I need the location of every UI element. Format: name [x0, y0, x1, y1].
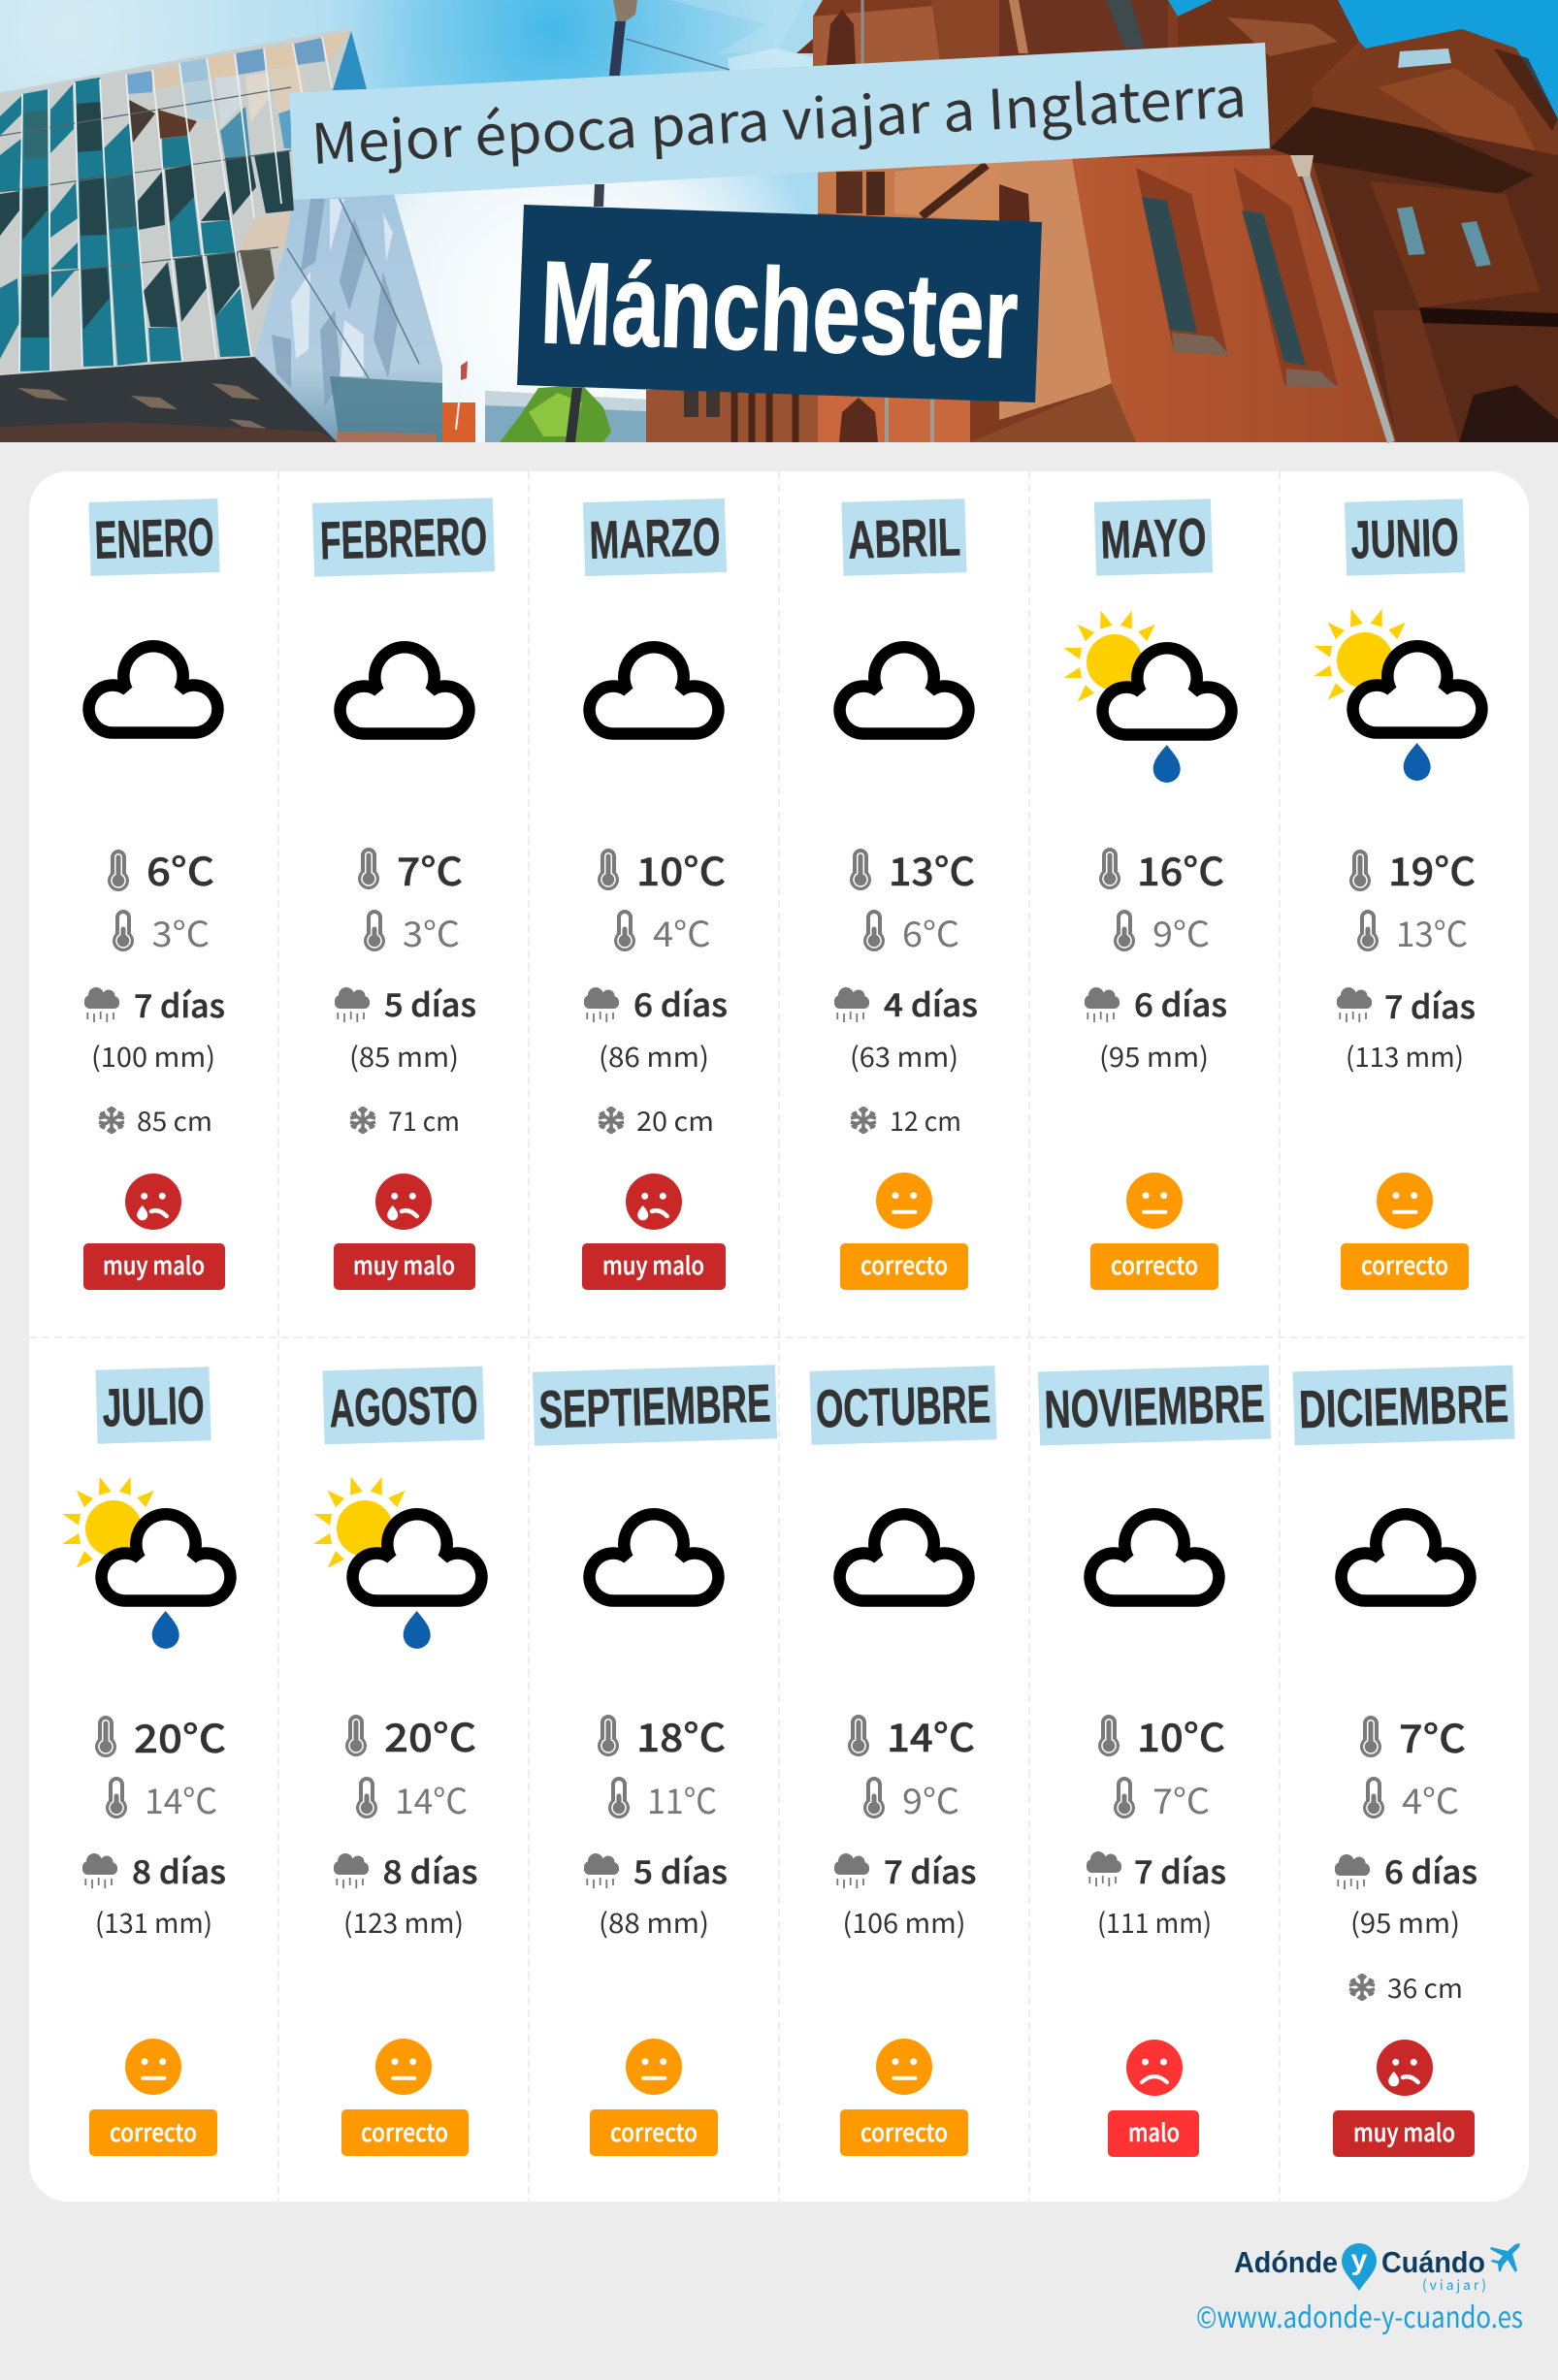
min temperature [863, 907, 959, 957]
rainy days [1335, 1847, 1477, 1893]
icon: cloud [590, 647, 718, 733]
rainy days [1337, 981, 1476, 1028]
panel: agosto [313, 1367, 485, 2156]
rainy days: 6 días [633, 980, 728, 1026]
snowfall [1349, 1968, 1463, 2006]
rainy days: 4 días [884, 980, 978, 1026]
rating badge: correcto [590, 2109, 718, 2156]
month label: septiembre [533, 1365, 777, 1446]
max temperature [598, 1707, 726, 1763]
rainfall: (113 mm) [1346, 1037, 1464, 1076]
panel: junio [1314, 499, 1481, 1290]
logo: Adónde y Cuándo viajar: Adónde [1234, 2245, 1338, 2279]
rainy days [334, 1847, 477, 1893]
max temperature [1098, 1707, 1225, 1763]
rating face [125, 2039, 181, 2095]
max temperature: 19°C [1388, 841, 1476, 897]
snowfall [851, 1101, 961, 1139]
month label: febrero: FEBRERO [319, 505, 488, 571]
min temperature: 9°C [1152, 907, 1210, 957]
panel: abril [834, 499, 978, 1290]
panel: julio [62, 1367, 230, 2156]
rating face [876, 1173, 932, 1229]
max temperature [1349, 841, 1476, 897]
rating face [1126, 1173, 1183, 1229]
rainy days: 7 días [1134, 1847, 1226, 1893]
max temperature [850, 841, 975, 897]
rating face [876, 2039, 932, 2095]
snowfall: 85 cm [137, 1101, 212, 1139]
rainy days [1085, 980, 1227, 1026]
max temperature [1099, 841, 1224, 897]
rainfall: (95 mm) [1350, 1903, 1460, 1942]
rainy days: 7 días [134, 981, 225, 1027]
icon: map pin [1342, 2243, 1377, 2291]
rainy days: 7 días [884, 1847, 976, 1893]
rating badge: correcto [840, 2109, 968, 2156]
min temperature [356, 1774, 468, 1824]
rainfall: (100 mm) [91, 1037, 215, 1076]
month label: marzo [583, 499, 727, 576]
rating face [1126, 2040, 1183, 2096]
rating face [125, 1174, 181, 1230]
rainy days [335, 980, 476, 1026]
rating face [1377, 1173, 1433, 1229]
snowfall [99, 1101, 212, 1139]
rainy days [84, 981, 225, 1027]
max temperature: 16°C [1137, 841, 1224, 897]
rainy days: 8 días [132, 1847, 226, 1893]
rating badge: muy malo [1333, 2110, 1475, 2157]
max temperature: 10°C [1137, 1707, 1225, 1763]
month label: enero: ENERO [94, 506, 214, 570]
rating badge: correcto: correcto [110, 2114, 197, 2149]
month label: julio [95, 1367, 211, 1444]
rating badge: muy malo [334, 1243, 475, 1290]
title banner: Mejor época para viajar a Inglaterra: Mejor época para viajar a Inglaterra [309, 53, 1249, 180]
max temperature [848, 1707, 975, 1763]
rating badge: correcto: correcto [860, 1247, 948, 1282]
rainy days: 5 días [633, 1847, 728, 1893]
month label: mayo: MAYO [1100, 506, 1207, 570]
icon: cloud [590, 1514, 718, 1600]
min temperature [1114, 907, 1210, 957]
rating badge: correcto: correcto [610, 2114, 698, 2149]
rainfall: (85 mm) [349, 1037, 459, 1076]
min temperature: 14°C [145, 1774, 217, 1824]
snowfall: 71 cm [388, 1101, 460, 1139]
min temperature [364, 907, 460, 957]
rating face [375, 1174, 432, 1230]
rainfall: (88 mm) [599, 1903, 709, 1942]
month label: octubre: OCTUBRE [815, 1373, 991, 1439]
rainy days: 6 días [1134, 980, 1227, 1026]
icon: sun, cloud and raindrop [62, 1477, 230, 1649]
min temperature: 13°C [1396, 907, 1468, 957]
icon: cloud [840, 1514, 968, 1600]
max temperature: 6°C [146, 841, 214, 897]
snowfall: 36 cm [1387, 1968, 1463, 2006]
month label: septiembre: SEPTIEMBRE [538, 1372, 771, 1440]
rating badge: correcto: correcto [860, 2114, 948, 2149]
month label: noviembre [1038, 1365, 1271, 1446]
max temperature: 13°C [889, 841, 975, 897]
rainfall: (106 mm) [842, 1903, 966, 1942]
max temperature: 7°C [397, 841, 463, 897]
header photo: Manchester buildings [0, 0, 1558, 442]
title banner: Mánchester: Mánchester [538, 236, 1020, 383]
rating badge: muy malo: muy malo [602, 1247, 704, 1282]
rating badge: muy malo [83, 1243, 225, 1290]
icon: cloud [840, 647, 968, 733]
panel: climate table card [29, 471, 1529, 2202]
min temperature: 9°C [902, 1774, 959, 1824]
rainfall: (131 mm) [95, 1903, 212, 1942]
month label: mayo [1094, 499, 1213, 576]
rating badge: correcto [89, 2109, 217, 2156]
rainy days [584, 980, 728, 1026]
min temperature: 3°C [403, 907, 460, 957]
max temperature: 14°C [887, 1707, 975, 1763]
rainy days [834, 980, 978, 1026]
rating face [375, 2039, 432, 2095]
min temperature [863, 1774, 959, 1824]
icon: cloud [341, 647, 469, 733]
rainfall: (123 mm) [343, 1903, 464, 1942]
icon: sun, cloud and raindrop [1063, 611, 1231, 783]
max temperature [345, 1707, 476, 1763]
panel: mayo [1063, 499, 1231, 1290]
min temperature [1357, 907, 1468, 957]
logo: Adónde y Cuándo viajar: (viajar) [1422, 2275, 1486, 2295]
rating badge: correcto [341, 2109, 469, 2156]
panel: septiembre [533, 1365, 777, 2156]
max temperature [1360, 1708, 1466, 1764]
max temperature: 18°C [636, 1707, 726, 1763]
month label: octubre [809, 1366, 997, 1445]
month label: febrero [312, 498, 495, 577]
min temperature: 6°C [902, 907, 959, 957]
icon: sun, cloud and raindrop [313, 1477, 481, 1649]
min temperature: 7°C [1152, 1774, 1210, 1824]
month label: abril [841, 499, 967, 576]
rainy days [834, 1847, 976, 1893]
snowfall: 12 cm [890, 1101, 961, 1139]
rainfall: (95 mm) [1099, 1037, 1209, 1076]
month label: abril: ABRIL [847, 506, 961, 570]
min temperature: 4°C [653, 907, 710, 957]
rating badge: malo: malo [1128, 2114, 1180, 2149]
rating badge: malo [1108, 2110, 1199, 2157]
max temperature: 10°C [636, 841, 726, 897]
min temperature: 4°C [1402, 1774, 1459, 1824]
month label: agosto: AGOSTO [329, 1374, 478, 1438]
max temperature: 7°C [1399, 1708, 1466, 1764]
min temperature: 3°C [151, 907, 210, 957]
month label: noviembre: NOVIEMBRE [1044, 1373, 1265, 1439]
snowfall: 20 cm [636, 1101, 714, 1139]
rating badge: muy malo [582, 1243, 726, 1290]
icon: cloud [1090, 1514, 1218, 1600]
min temperature [608, 1774, 717, 1824]
month label: junio [1345, 499, 1465, 576]
rating badge: correcto: correcto [361, 2114, 448, 2149]
rainfall: (63 mm) [850, 1037, 958, 1076]
max temperature [358, 841, 463, 897]
min temperature [1114, 1774, 1210, 1824]
month label: enero [88, 499, 220, 576]
snowfall [599, 1101, 714, 1139]
rating badge: correcto: correcto [1361, 1247, 1448, 1282]
logo: Adónde y Cuándo viajar: Cuándo [1381, 2245, 1485, 2279]
rainfall: (111 mm) [1097, 1903, 1212, 1942]
icon: cloud [1342, 1514, 1470, 1600]
month label: marzo: MARZO [589, 506, 721, 570]
rating badge: muy malo: muy malo [1353, 2114, 1455, 2149]
rainfall: (86 mm) [599, 1037, 709, 1076]
rating badge: muy malo: muy malo [353, 1247, 455, 1282]
snowfall [350, 1101, 460, 1139]
min temperature [1363, 1774, 1459, 1824]
max temperature: 20°C [384, 1707, 476, 1763]
panel: octubre [809, 1366, 997, 2156]
min temperature: 11°C [647, 1774, 717, 1824]
rating face [1377, 2040, 1433, 2096]
logo: Adónde y Cuándo viajar [1234, 2243, 1520, 2295]
rainy days [1087, 1847, 1226, 1893]
rainy days [584, 1847, 728, 1893]
max temperature [598, 841, 726, 897]
max temperature: 20°C [134, 1708, 226, 1764]
rainy days: 7 días [1384, 981, 1476, 1028]
rainy days: 8 días [382, 1847, 477, 1893]
rating badge: correcto [840, 1243, 968, 1290]
min temperature: 14°C [395, 1774, 468, 1824]
rainy days [82, 1847, 226, 1893]
rainy days: 5 días [384, 980, 476, 1026]
rating face [626, 1174, 682, 1230]
icon: cloud [89, 646, 217, 733]
month label: agosto [322, 1367, 485, 1444]
rating badge: correcto [1090, 1243, 1218, 1290]
logo: Adónde y Cuándo viajar: y [1351, 2244, 1368, 2276]
panel: diciembre [1292, 1366, 1515, 2157]
rating badge: correcto: correcto [1111, 1247, 1198, 1282]
min temperature [106, 1774, 217, 1824]
rainy days: 6 días [1384, 1847, 1477, 1893]
rating face [626, 2039, 682, 2095]
panel: noviembre [1038, 1365, 1271, 2157]
min temperature [113, 907, 210, 957]
rating badge: correcto [1341, 1243, 1469, 1290]
panel: enero [83, 499, 225, 1290]
panel: marzo [582, 499, 728, 1290]
rating badge: muy malo: muy malo [103, 1247, 205, 1282]
icon: sun, cloud and raindrop [1314, 609, 1481, 781]
month label: junio: JUNIO [1350, 506, 1459, 570]
max temperature [108, 841, 214, 897]
icon: airplane [1490, 2243, 1520, 2272]
panel: febrero [312, 498, 495, 1290]
max temperature [95, 1708, 226, 1764]
title banner: Mánchester [517, 205, 1042, 402]
month label: julio: JULIO [102, 1374, 205, 1438]
min temperature [614, 907, 710, 957]
